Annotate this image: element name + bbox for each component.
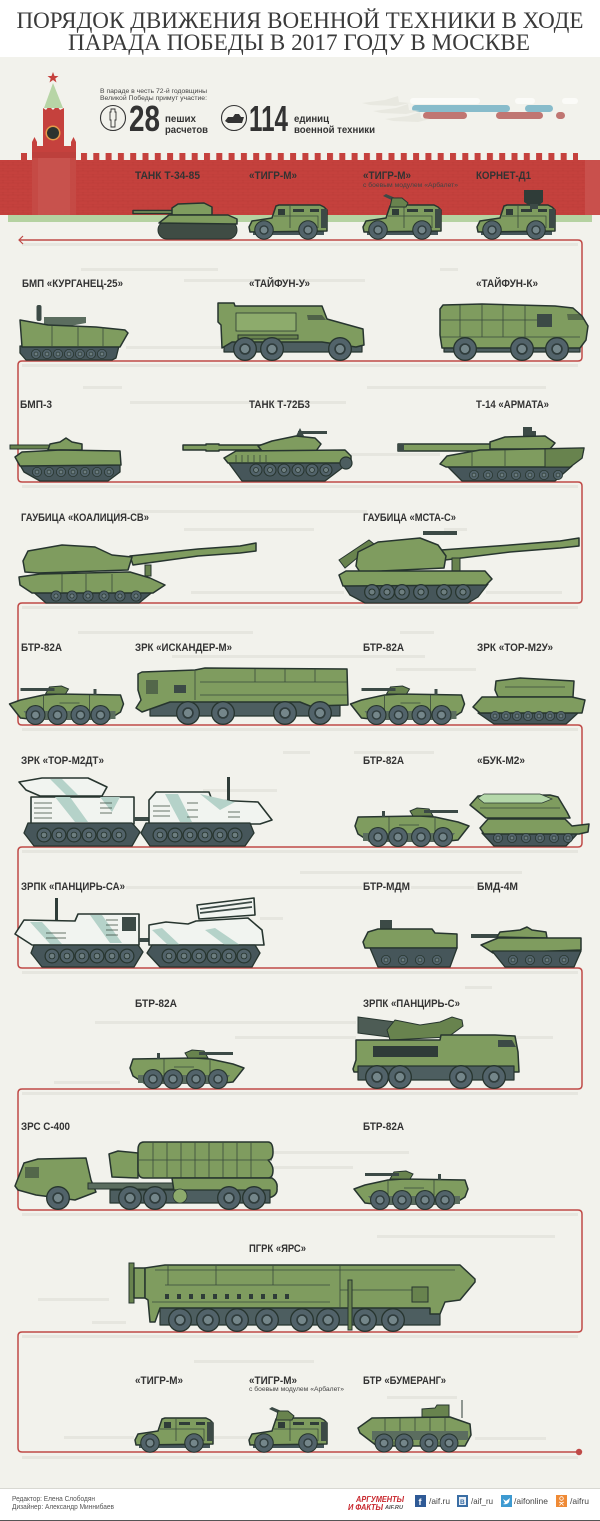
jets with smoke trails [362, 96, 578, 122]
row 5 labels: БТР-82А [363, 642, 404, 654]
dotted haze bands [22, 243, 578, 1459]
logo: AiF: И ФАКТЫ [348, 1502, 383, 1512]
row 1 labels [135, 170, 531, 189]
row 8 labels [135, 998, 460, 1010]
Kremlin wall [0, 153, 600, 222]
vehicle: Pantsir-SA tracked [15, 898, 264, 967]
vehicle: S-400 [15, 1142, 277, 1210]
row 5 labels: БТР-82А [21, 642, 62, 654]
row 3 labels: БМП-3 [20, 399, 52, 411]
social links: /aifonline [514, 1496, 548, 1506]
row 11 labels [135, 1375, 446, 1393]
row 2 labels: «ТАЙФУН-К» [476, 277, 538, 290]
row 9 labels [21, 1121, 404, 1133]
row 6 labels [21, 755, 525, 767]
row 5 labels [21, 642, 553, 654]
vehicle: Iskander-M [136, 668, 348, 725]
row 6 labels: ЗРК «ТОР-М2ДТ» [21, 755, 104, 767]
row 10 label: ПГРК «ЯРС» [249, 1243, 306, 1255]
vehicle: Tigr-M Arbalet [363, 194, 441, 240]
row 9 labels: БТР-82А [363, 1121, 404, 1133]
stat: 28 foot crews: расчетов [165, 124, 208, 136]
Spasskaya tower [32, 72, 76, 215]
vehicle: Msta-S [339, 531, 579, 603]
intro text: В параде в честь 72-й годовщины [100, 87, 207, 95]
vehicle: BMP Kurganets-25 [20, 305, 128, 360]
row 9 labels: ЗРС С-400 [21, 1121, 70, 1133]
row 1 labels: ТАНК Т-34-85 [135, 170, 200, 182]
social links: /aif.ru [429, 1496, 450, 1506]
vehicle: BTR-82A [350, 686, 464, 725]
vehicle: Typhoon-K [440, 304, 588, 361]
row 4 labels: ГАУБИЦА «КОАЛИЦИЯ-СВ» [21, 512, 149, 524]
title [16, 8, 584, 56]
stat: 28 foot crews: пеших [165, 113, 196, 125]
stat: 28 foot crews [100, 98, 208, 139]
social links: В [460, 1499, 465, 1506]
row 2 labels: «ТАЙФУН-У» [249, 277, 310, 290]
vehicle: Boomerang [358, 1400, 471, 1452]
row 1 labels: с боевым модулем «Арбалет» [363, 181, 458, 189]
row 4 labels: ГАУБИЦА «МСТА-С» [363, 512, 456, 524]
footer [0, 1488, 600, 1521]
vehicle: BMD-4M [471, 927, 581, 967]
row 11 labels: с боевым модулем «Арбалет» [249, 1385, 344, 1393]
social links: f [418, 1497, 422, 1507]
row 2 labels: БМП «КУРГАНЕЦ-25» [22, 278, 123, 290]
credits: Редактор: Елена Слободян [12, 1495, 95, 1503]
stat: 28 foot crews: 28 [129, 98, 160, 139]
vehicle: Tor-M2U [473, 678, 585, 724]
vehicle: BTR-82A [354, 1171, 468, 1210]
row 1 labels: «ТИГР-М» [363, 170, 411, 182]
social links: /aif_ru [471, 1496, 493, 1506]
credits: Дизайнер: Александр Миннибаев [12, 1503, 114, 1511]
row 4 labels [21, 512, 456, 524]
vehicle: Buk-M2 [470, 794, 589, 846]
row 8 labels: БТР-82А [135, 998, 177, 1010]
stat: 114 vehicles [222, 98, 375, 139]
logo: AiF [348, 1494, 404, 1512]
stat: 114 vehicles: военной техники [294, 124, 375, 136]
vehicle: T-72B3 [183, 428, 352, 481]
social links [415, 1495, 589, 1507]
stat: 114 vehicles: 114 [249, 98, 288, 139]
row 5 labels: ЗРК «ТОР-М2У» [477, 642, 553, 654]
vehicle: BTR-82A flipped [130, 1050, 244, 1089]
row 6 labels: БТР-82А [363, 755, 404, 767]
row 11 labels: БТР «БУМЕРАНГ» [363, 1375, 446, 1387]
intro text [100, 87, 207, 102]
row 6 labels: «БУК-М2» [477, 755, 525, 767]
vehicle: Tigr-M [135, 1418, 213, 1453]
vehicle: Kornet-D1 [477, 190, 555, 240]
intro text: Великой Победы примут участие: [100, 94, 207, 102]
row 3 labels: ТАНК Т-72Б3 [249, 399, 310, 411]
row 1 labels: КОРНЕТ-Д1 [476, 170, 531, 182]
credits [12, 1495, 114, 1511]
title: ПОРЯДОК ДВИЖЕНИЯ ВОЕННОЙ ТЕХНИКИ В ХОДЕ [16, 8, 584, 34]
logo: AiF: АРГУМЕНТЫ [355, 1494, 404, 1504]
row 3 labels: Т-14 «АРМАТА» [476, 399, 549, 411]
row 11 labels: «ТИГР-М» [249, 1375, 297, 1387]
row 11 labels: «ТИГР-М» [135, 1375, 183, 1387]
vehicle: Koalitsiya-SV [19, 543, 256, 603]
vehicle: BTR-82A [10, 686, 124, 725]
parade route line [18, 236, 582, 1455]
logo: AiF: AIF.RU [384, 1505, 404, 1511]
vehicle: BTR-MDM [363, 920, 457, 967]
row 7 labels: БТР-МДМ [363, 881, 410, 893]
vehicle: T-34-85 [133, 203, 237, 239]
vehicle: Pantsir-S [353, 1017, 519, 1089]
row 2 labels [22, 277, 538, 290]
vehicle: Tigr-M Arbalet [249, 1407, 327, 1453]
row 5 labels: ЗРК «ИСКАНДЕР-М» [135, 642, 232, 654]
row 1 labels: «ТИГР-М» [249, 170, 297, 182]
row 7 labels: ЗРПК «ПАНЦИРЬ-СА» [21, 881, 125, 893]
vehicle: Typhoon-U [218, 303, 364, 361]
vehicle: T-14 Armata [398, 427, 584, 481]
social links: /aifru [570, 1496, 589, 1506]
row 8 labels: ЗРПК «ПАНЦИРЬ-С» [363, 998, 460, 1010]
row 7 labels: БМД-4М [477, 881, 518, 893]
title: ПАРАДА ПОБЕДЫ В 2017 ГОДУ В МОСКВЕ [68, 30, 530, 56]
vehicle: BMP-3 [10, 438, 121, 481]
vehicle: BTR-82A flipped [355, 808, 469, 847]
vehicle: Tor-M2DT [19, 777, 272, 846]
vehicle: Yars [129, 1263, 475, 1332]
row 7 labels [21, 881, 518, 893]
row 3 labels [20, 399, 549, 411]
vehicle: Tigr-M [249, 205, 327, 240]
stat: 114 vehicles: единиц [294, 113, 329, 125]
